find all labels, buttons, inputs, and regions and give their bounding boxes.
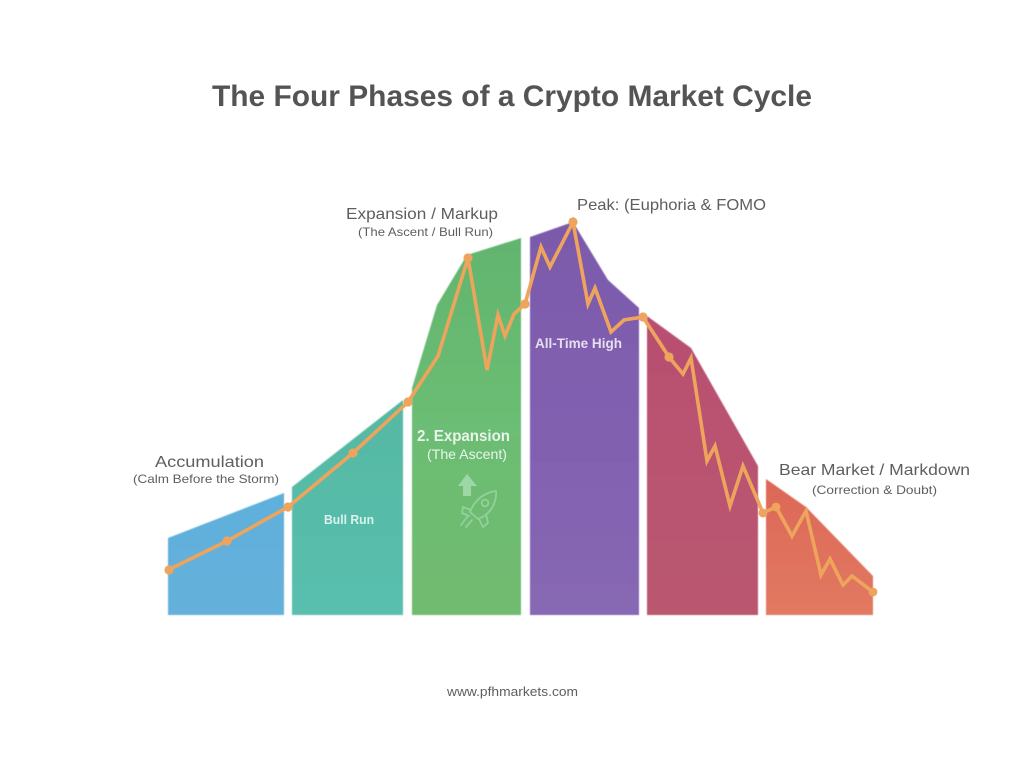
- footer website: www.pfhmarkets.com: [446, 685, 578, 699]
- panel: markdown area: [766, 479, 873, 615]
- panel: accumulation area: [168, 493, 284, 615]
- callout: accumulation: (Calm Before the Storm): [133, 472, 279, 486]
- callout: peak: Peak: (Euphoria & FOMO: [577, 197, 766, 214]
- icon: up arrow: [458, 474, 477, 496]
- label: expansion phase: 2. Expansion: [417, 428, 510, 445]
- label: bull run: Bull Run: [324, 512, 374, 527]
- callout: bear market / markdown: (Correction & Doubt): [812, 483, 937, 497]
- label: the ascent: (The Ascent): [427, 446, 507, 462]
- label: all-time high: All-Time High: [535, 335, 622, 351]
- panel: peak area: [530, 222, 639, 615]
- price line with markers: [164, 217, 877, 596]
- title: The Four Phases of a Crypto Market Cycle: [212, 80, 812, 113]
- icon: rocket: [461, 491, 496, 527]
- area chart: market cycle phases: [168, 222, 873, 615]
- callout: bear market / markdown: [779, 462, 970, 497]
- panel: expansion area: [412, 238, 521, 615]
- callout: expansion / markup: Expansion / Markup: [346, 206, 498, 223]
- panel: correction area: [647, 316, 758, 615]
- callout: accumulation: Accumulation: [155, 454, 264, 471]
- callout: expansion / markup: (The Ascent / Bull Run): [358, 225, 493, 239]
- callout: bear market / markdown: Bear Market / Markdown: [779, 462, 970, 479]
- callout: accumulation: [133, 454, 279, 486]
- callout: expansion / markup: [346, 206, 498, 239]
- panel: bull run area: [292, 400, 403, 615]
